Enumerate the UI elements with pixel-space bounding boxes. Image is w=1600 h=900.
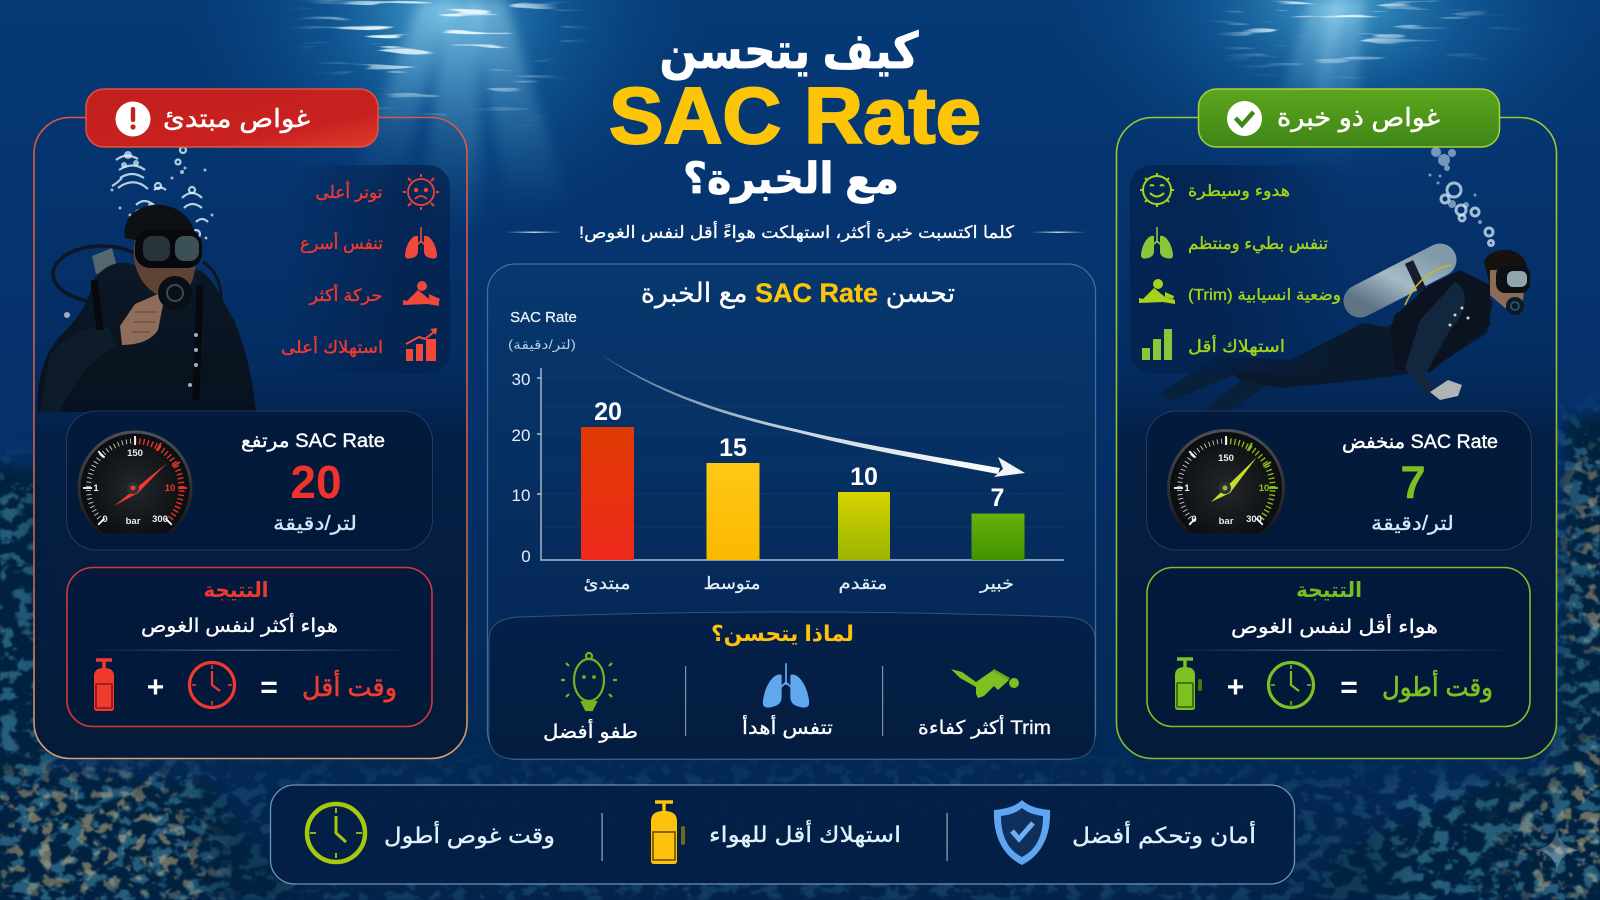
chart title: تحسن SAC Rate مع الخبرة — [641, 278, 955, 309]
axis unit: (لتر/دقيقة) — [508, 337, 576, 353]
row: more movement — [308, 281, 440, 306]
icon: check — [1227, 101, 1262, 136]
bar chart: SAC rate by experience — [508, 309, 1064, 593]
reason: better buoyancy — [543, 653, 638, 743]
gauge: low: 300 — [1246, 514, 1262, 525]
reason: calmer breathing — [742, 663, 833, 739]
result heading: التتيجة — [204, 579, 268, 602]
title: كيف يتحسن — [660, 23, 919, 81]
bar chart: SAC rate by experience: 10 — [512, 486, 530, 505]
row: slow breathing — [1141, 227, 1328, 259]
gauge: high: 0 — [102, 514, 108, 525]
result: less time: وقت أقل — [302, 669, 397, 703]
result: more time: وقت أطول — [1382, 669, 1493, 703]
bar chart: SAC rate by experience: 30 — [512, 370, 530, 389]
value 20: 20 — [290, 456, 342, 508]
plus: + — [147, 671, 164, 704]
bar: beginner 20: 20 — [594, 398, 622, 426]
tank — [1360, 260, 1440, 301]
SAC rate gauge card: high — [66, 411, 432, 550]
result text: هواء أقل لنفس الغوص — [1231, 614, 1438, 638]
gauge: low — [1168, 430, 1284, 546]
bar: intermediate 15: 15 — [719, 434, 747, 462]
result text: هواء أكثر لنفس الغوص — [141, 613, 338, 637]
row: calm: هدوء وسيطرة — [1188, 183, 1290, 201]
SAC rate label: SAC Rate مرتفع — [241, 431, 385, 452]
gauge: high: 10 — [165, 483, 175, 494]
benefit rows — [1130, 165, 1345, 373]
benefit: less air consumption — [651, 802, 901, 864]
row: faster breathing — [300, 227, 437, 259]
illustration: experienced diver with bubbles — [1160, 147, 1530, 412]
bar: intermediate 15: متوسط — [704, 574, 760, 593]
bar: advanced 10 — [838, 463, 890, 593]
bar: expert 7: 7 — [991, 484, 1004, 512]
badge label: غواص ذو خبرة — [1277, 104, 1440, 133]
result heading: التتيجة — [1296, 579, 1362, 602]
icon: warning — [116, 102, 150, 136]
row: lower consumption — [1142, 329, 1285, 360]
sparkle mark — [1534, 828, 1581, 872]
bar: beginner 20: مبتدئ — [584, 574, 630, 593]
gauge: low: 150 — [1218, 453, 1234, 464]
benefit: less air consumption: استهلاك أقل للهواء — [709, 820, 901, 847]
unit: لتر/دقيقة — [1371, 513, 1454, 535]
bar: expert 7: خبير — [979, 574, 1014, 593]
plus: + — [1227, 671, 1244, 704]
bar: expert 7 — [972, 484, 1024, 593]
bar: intermediate 15 — [704, 434, 760, 593]
badge label: غواص مبتدئ — [163, 105, 310, 133]
row: higher consumption: استهلاك أعلى — [281, 336, 383, 358]
gauge: high — [79, 432, 191, 544]
subtitle: كلما اكتسبت خبرة أكثر، استهلكت هواءً أقل لنفس الغوص! — [579, 221, 1015, 243]
badge: beginner diver — [86, 89, 378, 147]
equals: = — [1340, 671, 1358, 704]
result box: beginner — [67, 568, 432, 726]
gauge: low: 0 — [1191, 514, 1197, 525]
title — [609, 23, 981, 204]
icon: red tank — [94, 660, 114, 711]
section: why it improves — [489, 612, 1095, 759]
gauge: low: 1 — [1184, 483, 1190, 494]
reason: calmer breathing: تتفس أهدأ — [742, 715, 833, 739]
gauge: high: 300 — [152, 514, 168, 525]
panel: beginner diver — [34, 89, 467, 758]
benefit: longer dive time — [307, 804, 555, 862]
row: stress — [316, 174, 439, 210]
row: calm — [1140, 173, 1290, 207]
section heading: لماذا يتحسن؟ — [711, 621, 854, 647]
axis title: SAC Rate — [510, 309, 577, 326]
row: faster breathing: تنفس أسرع — [300, 232, 383, 254]
bar: advanced 10: 10 — [850, 463, 878, 491]
symptom rows — [281, 165, 450, 373]
result box: experienced — [1147, 568, 1530, 726]
SAC rate gauge card: low — [1146, 411, 1532, 550]
equals: = — [260, 671, 278, 704]
row: lower consumption: استهلاك أقل — [1188, 335, 1285, 357]
bar: beginner 20 — [581, 398, 634, 593]
benefit: safety and control — [994, 800, 1256, 865]
gauge: low: 10 — [1259, 483, 1269, 494]
title highlight: SAC Rate: SAC Rate — [609, 71, 981, 160]
row: higher consumption — [281, 328, 437, 361]
icon: green tank — [1175, 659, 1202, 710]
bar chart: SAC rate by experience: 20 — [512, 426, 530, 445]
bar: advanced 10: متقدم — [838, 574, 888, 593]
bottom benefits bar — [270, 785, 1294, 884]
reason: efficient trim — [918, 669, 1051, 739]
illustration: beginner diver with bubbles — [38, 147, 256, 412]
reason: better buoyancy: طفو أفضل — [543, 719, 638, 743]
gauge: low: bar — [1219, 516, 1234, 527]
fins — [1160, 350, 1268, 412]
panel: chart and reasons — [488, 264, 1096, 759]
benefit: longer dive time: وقت غوص أطول — [384, 821, 555, 849]
row: trim: وضعية انسيابية (Trim) — [1188, 287, 1341, 305]
row: more movement: حركة أكثر — [308, 284, 382, 305]
icon: red clock — [190, 662, 234, 708]
unit: لتر/دقيقة — [273, 513, 357, 535]
icon: green clock — [1268, 662, 1314, 708]
trend arrow — [600, 354, 1025, 477]
benefit: safety and control: أمان وتحكم أفضل — [1072, 821, 1256, 849]
bar chart: SAC rate by experience: 0 — [521, 547, 531, 566]
gauge: high: 1 — [93, 483, 99, 494]
row: trim — [1139, 279, 1341, 305]
row: slow breathing: تنفس بطيء ومنتظم — [1188, 234, 1328, 254]
panel: experienced diver — [1116, 89, 1556, 758]
value 7: 7 — [1400, 456, 1426, 508]
reason: efficient trim: Trim أكثر كفاءة — [918, 715, 1051, 739]
SAC rate label: SAC Rate منخفض — [1342, 432, 1498, 453]
title last line: مع الخبرة؟ — [683, 155, 899, 204]
gauge: high: bar — [126, 516, 141, 527]
badge: experienced diver — [1198, 89, 1500, 147]
gauge: high: 150 — [127, 448, 143, 459]
row: stress: توتر أعلى — [316, 181, 383, 202]
